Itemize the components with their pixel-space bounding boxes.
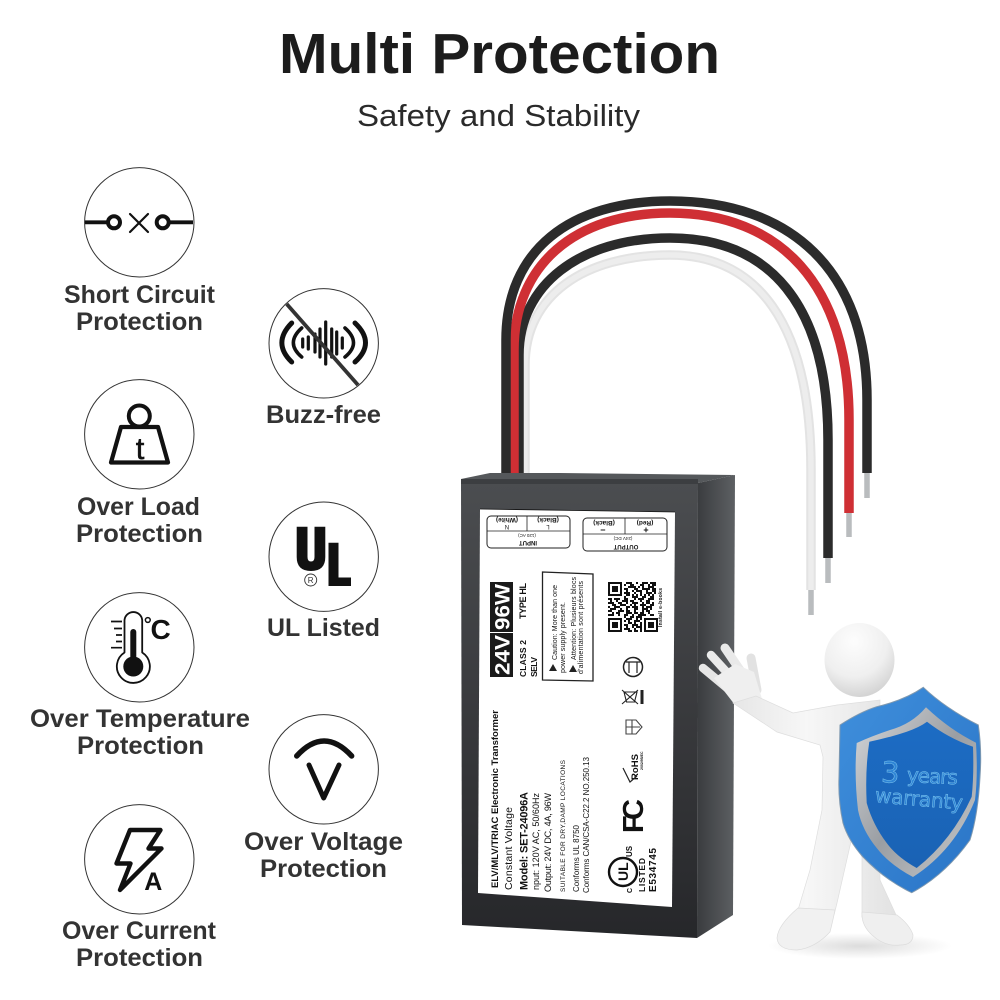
output terminals: − <box>600 525 606 535</box>
box side face <box>697 475 735 938</box>
QR caption: Install e-books <box>658 588 664 627</box>
feature: over current protection <box>62 805 217 972</box>
label: over load protection <box>76 493 203 548</box>
label: over temperature protection <box>30 705 250 760</box>
model and specs text: Model: SET-24096A <box>518 792 530 890</box>
icon: crossed sound wave <box>269 289 378 398</box>
UL listed mark: LISTED <box>637 858 647 892</box>
white wire <box>525 255 811 590</box>
model and specs text: Conforms UL 8750 <box>572 824 581 892</box>
feature: buzz-free <box>266 289 381 429</box>
output terminals: OUTPUT <box>613 543 638 549</box>
24V 96W badge: 24V <box>492 635 514 675</box>
wire tips <box>811 472 867 615</box>
UL listed mark <box>609 845 659 893</box>
input terminals: L <box>546 523 550 529</box>
class and type text: TYPE HL <box>518 582 528 619</box>
warranty figure <box>703 623 981 959</box>
input terminals: (120 AC) <box>518 533 536 538</box>
shield text: 3 <box>880 755 900 790</box>
feature: short circuit protection <box>64 168 216 336</box>
output terminals <box>583 518 667 551</box>
model and specs text: Conforms CAN/CSA-C22.2 NO.250.13 <box>582 756 591 893</box>
input terminals <box>487 516 570 548</box>
label: short circuit protection: Protection <box>76 308 203 336</box>
output terminals: (Black) <box>593 519 615 526</box>
figure hand <box>703 648 762 705</box>
output terminals: (Red) <box>637 519 653 526</box>
label: over temperature protection: Protection <box>77 732 204 760</box>
24V 96W badge: 96W <box>492 584 514 630</box>
UL listed mark: C <box>627 888 634 893</box>
ground shadow <box>768 933 952 959</box>
label: UL listed: UL Listed <box>267 614 380 642</box>
caution box: power supply present. <box>560 602 567 673</box>
model and specs text: nput: 120V AC, 50/60Hz <box>531 792 541 890</box>
icon: weight: t <box>136 431 145 466</box>
model and specs text: Output: 24V DC, 4A, 96W <box>543 792 553 892</box>
class and type text: SELV <box>529 657 539 677</box>
RoHS mark: RoHS <box>630 754 641 780</box>
box front face <box>461 484 698 938</box>
product label <box>478 509 675 907</box>
shield text <box>874 755 964 815</box>
icon: bolt with A <box>85 805 194 914</box>
caution box: d'alimentation sont présents <box>578 580 585 674</box>
caution box: Attention: Plusieurs blocs <box>571 576 578 660</box>
RoHS mark: 2002/95/EC <box>640 751 644 770</box>
24V 96W badge <box>490 582 514 677</box>
input terminals: INPUT <box>519 539 537 545</box>
label: short circuit protection <box>64 281 216 336</box>
FCC mark: FC <box>618 799 650 833</box>
certification symbol: crossed bin <box>622 690 642 704</box>
red wire <box>514 213 849 513</box>
label: over voltage protection <box>244 828 403 883</box>
UL listed mark: UL <box>615 862 631 881</box>
class and type text: CLASS 2 <box>518 640 528 677</box>
model and specs text: ELV/MLV/TRIAC Electronic Transformer <box>490 710 501 888</box>
shield text: warranty <box>874 783 964 815</box>
caution box <box>542 572 593 681</box>
icon: weight <box>85 380 194 489</box>
icon: voltage arc <box>269 715 378 824</box>
model and specs text <box>490 710 591 893</box>
wires <box>506 201 867 615</box>
title: Multi Protection <box>279 22 720 86</box>
subtitle: Safety and Stability <box>357 98 641 133</box>
icon: thermometer: C <box>150 614 171 645</box>
figure head <box>824 623 894 697</box>
box top face <box>461 473 735 483</box>
feature: UL listed <box>267 502 380 642</box>
transformer box <box>461 473 735 938</box>
label: over voltage protection: Over Voltage <box>244 828 403 856</box>
output terminals: + <box>643 525 649 535</box>
caution box: Caution: More than one <box>552 585 559 660</box>
certification symbol: shield mark <box>626 720 642 734</box>
UL listed mark: E534745 <box>648 848 659 892</box>
input terminals: N <box>505 523 509 529</box>
label: over voltage protection: Protection <box>260 855 387 883</box>
feature: over voltage protection <box>244 715 403 883</box>
class and type text <box>518 582 539 677</box>
certification symbol: round mark <box>624 658 642 676</box>
UL listed mark: US <box>625 845 634 857</box>
model and specs text: Constant Voltage <box>503 807 515 890</box>
model and specs text: SUITABLE FOR DRY,DAMP LOCATIONS <box>560 759 567 892</box>
icon: bolt with A: A <box>144 868 162 896</box>
black outer wire <box>506 201 867 476</box>
label: short circuit protection: Short Circuit <box>64 281 216 309</box>
QR code <box>608 582 658 632</box>
input terminals: (Black) <box>537 516 559 523</box>
output terminals: (24V DC) <box>613 536 632 541</box>
icon: UL mark: R <box>308 576 314 585</box>
figure body <box>733 696 897 917</box>
shield <box>839 687 981 893</box>
label: over current protection: Protection <box>76 944 203 972</box>
feature: over load protection <box>76 380 203 548</box>
feature: over temperature protection <box>30 593 250 760</box>
label: buzz-free: Buzz-free <box>266 401 381 429</box>
label: over current protection <box>62 917 217 972</box>
shield text: years <box>906 763 959 789</box>
label: over temperature protection: Over Temperature <box>30 705 250 733</box>
black inner wire <box>519 238 828 558</box>
label: over current protection: Over Current <box>62 917 217 945</box>
label: over load protection: Protection <box>76 520 203 548</box>
figure right foot <box>862 912 913 945</box>
label: over load protection: Over Load <box>77 493 200 521</box>
figure left foot <box>777 908 835 950</box>
icon: thermometer <box>85 593 194 702</box>
icon: short circuit <box>85 168 194 277</box>
input terminals: (White) <box>496 516 518 523</box>
RoHS mark <box>623 751 644 782</box>
